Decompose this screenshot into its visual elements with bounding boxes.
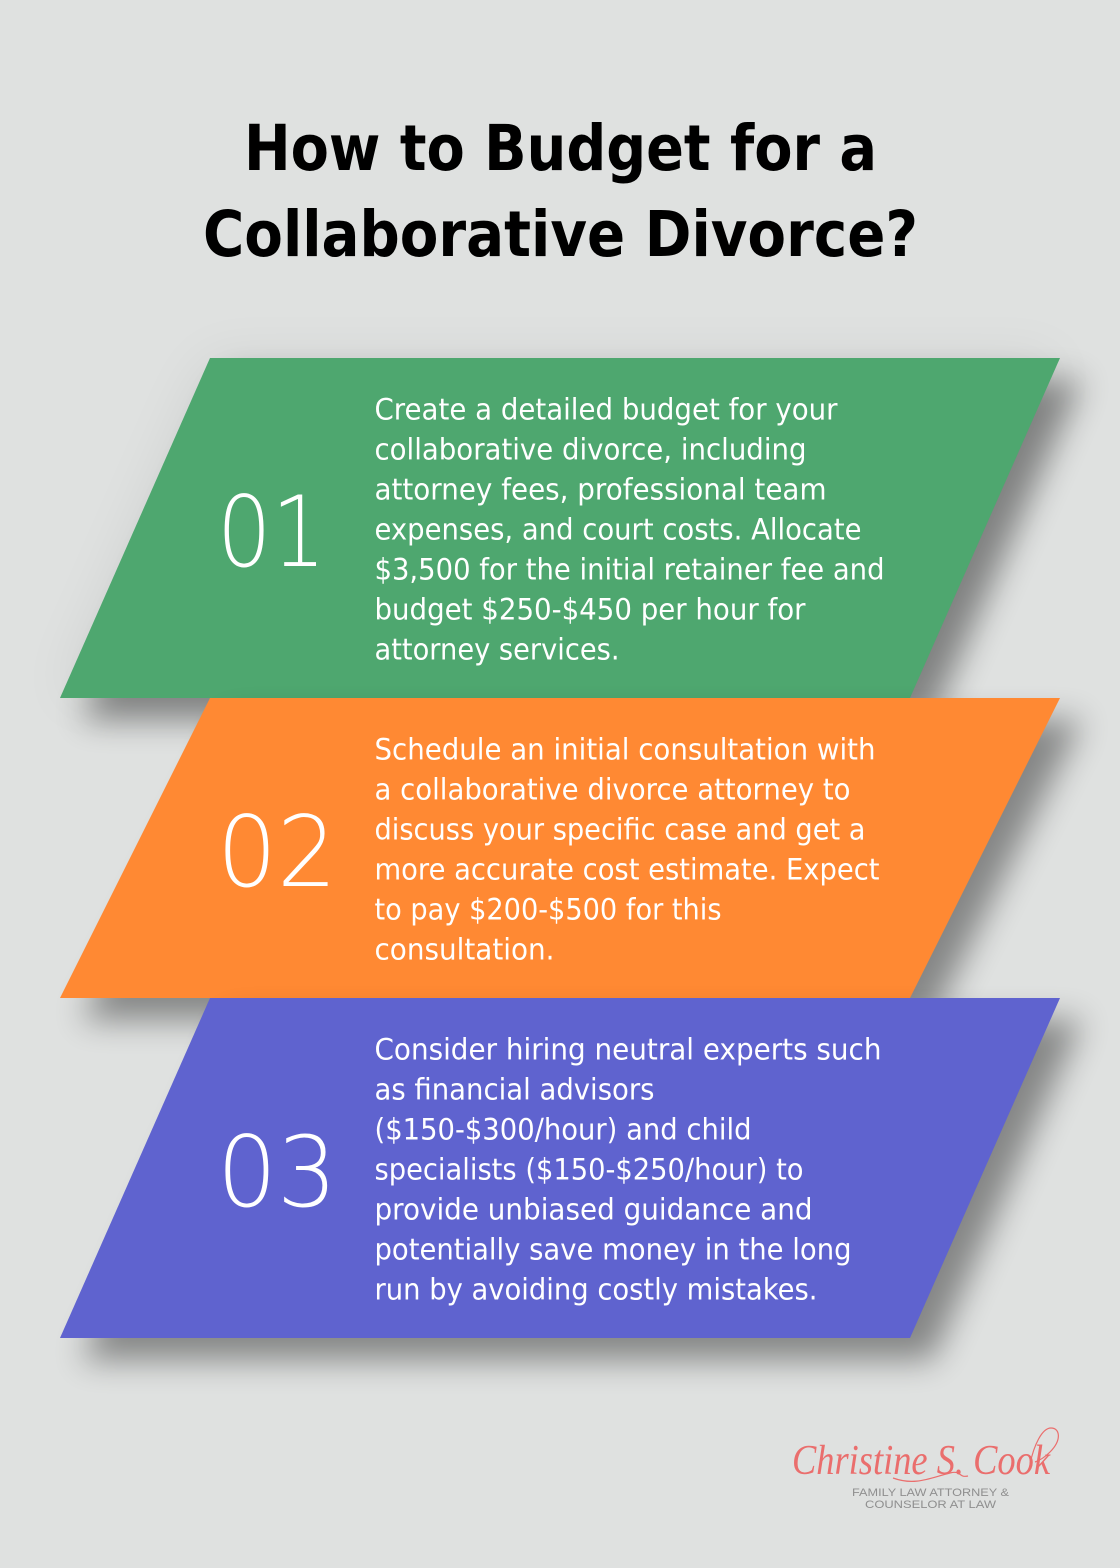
panel: step 3 bbox=[60, 998, 1082, 1360]
green parallelogram bbox=[60, 358, 1060, 698]
logo signature: Christine S. Cook bbox=[792, 1438, 1051, 1484]
panel: step 1 bbox=[60, 358, 1082, 720]
logo tagline: FAMILY LAW ATTORNEY & bbox=[852, 1487, 1010, 1499]
logo bbox=[792, 1428, 1058, 1511]
logo tagline bbox=[852, 1487, 1010, 1511]
orange parallelogram bbox=[60, 698, 1060, 998]
number 02: 02 bbox=[217, 796, 337, 910]
step 2 text: discuss your specific case and get a bbox=[374, 812, 866, 846]
purple parallelogram bbox=[60, 998, 1060, 1338]
number 01: 01 bbox=[217, 476, 326, 590]
title: How to Budget for a bbox=[244, 112, 877, 185]
step 2 text: consultation. bbox=[374, 932, 554, 966]
step 1 text bbox=[374, 392, 884, 666]
step 3 text: run by avoiding costly mistakes. bbox=[374, 1272, 818, 1306]
step 3 text: specialists ($150-$250/hour) to bbox=[374, 1152, 804, 1186]
step 3 text: potentially save money in the long bbox=[374, 1232, 852, 1266]
step 2 text: more accurate cost estimate. Expect bbox=[374, 852, 880, 886]
step 1 text: Create a detailed budget for your bbox=[374, 392, 838, 426]
step 1 text: attorney fees, professional team bbox=[374, 472, 826, 506]
step 3 text: as financial advisors bbox=[374, 1072, 654, 1106]
step 1 text: expenses, and court costs. Allocate bbox=[374, 512, 862, 546]
step 3 text: provide unbiased guidance and bbox=[374, 1192, 812, 1226]
title: Collaborative Divorce? bbox=[203, 198, 918, 271]
logo swash bbox=[893, 1428, 1058, 1481]
step 1 text: attorney services. bbox=[374, 632, 620, 666]
step 2 text: a collaborative divorce attorney to bbox=[374, 772, 850, 806]
step 1 text: budget $250-$450 per hour for bbox=[374, 592, 806, 626]
step 1 text: $3,500 for the initial retainer fee and bbox=[374, 552, 884, 586]
step 2 text: Schedule an initial consultation with bbox=[374, 732, 876, 766]
step 2 text: to pay $200-$500 for this bbox=[374, 892, 722, 926]
step 2 text bbox=[374, 732, 880, 966]
title bbox=[203, 112, 918, 271]
logo tagline: COUNSELOR AT LAW bbox=[865, 1499, 997, 1511]
step 3 text bbox=[374, 1032, 882, 1306]
panel: step 2 bbox=[60, 698, 1082, 1020]
step 1 text: collaborative divorce, including bbox=[374, 432, 806, 466]
step 3 text: Consider hiring neutral experts such bbox=[374, 1032, 882, 1066]
step 3 text: ($150-$300/hour) and child bbox=[374, 1112, 752, 1146]
number 03: 03 bbox=[217, 1116, 337, 1230]
